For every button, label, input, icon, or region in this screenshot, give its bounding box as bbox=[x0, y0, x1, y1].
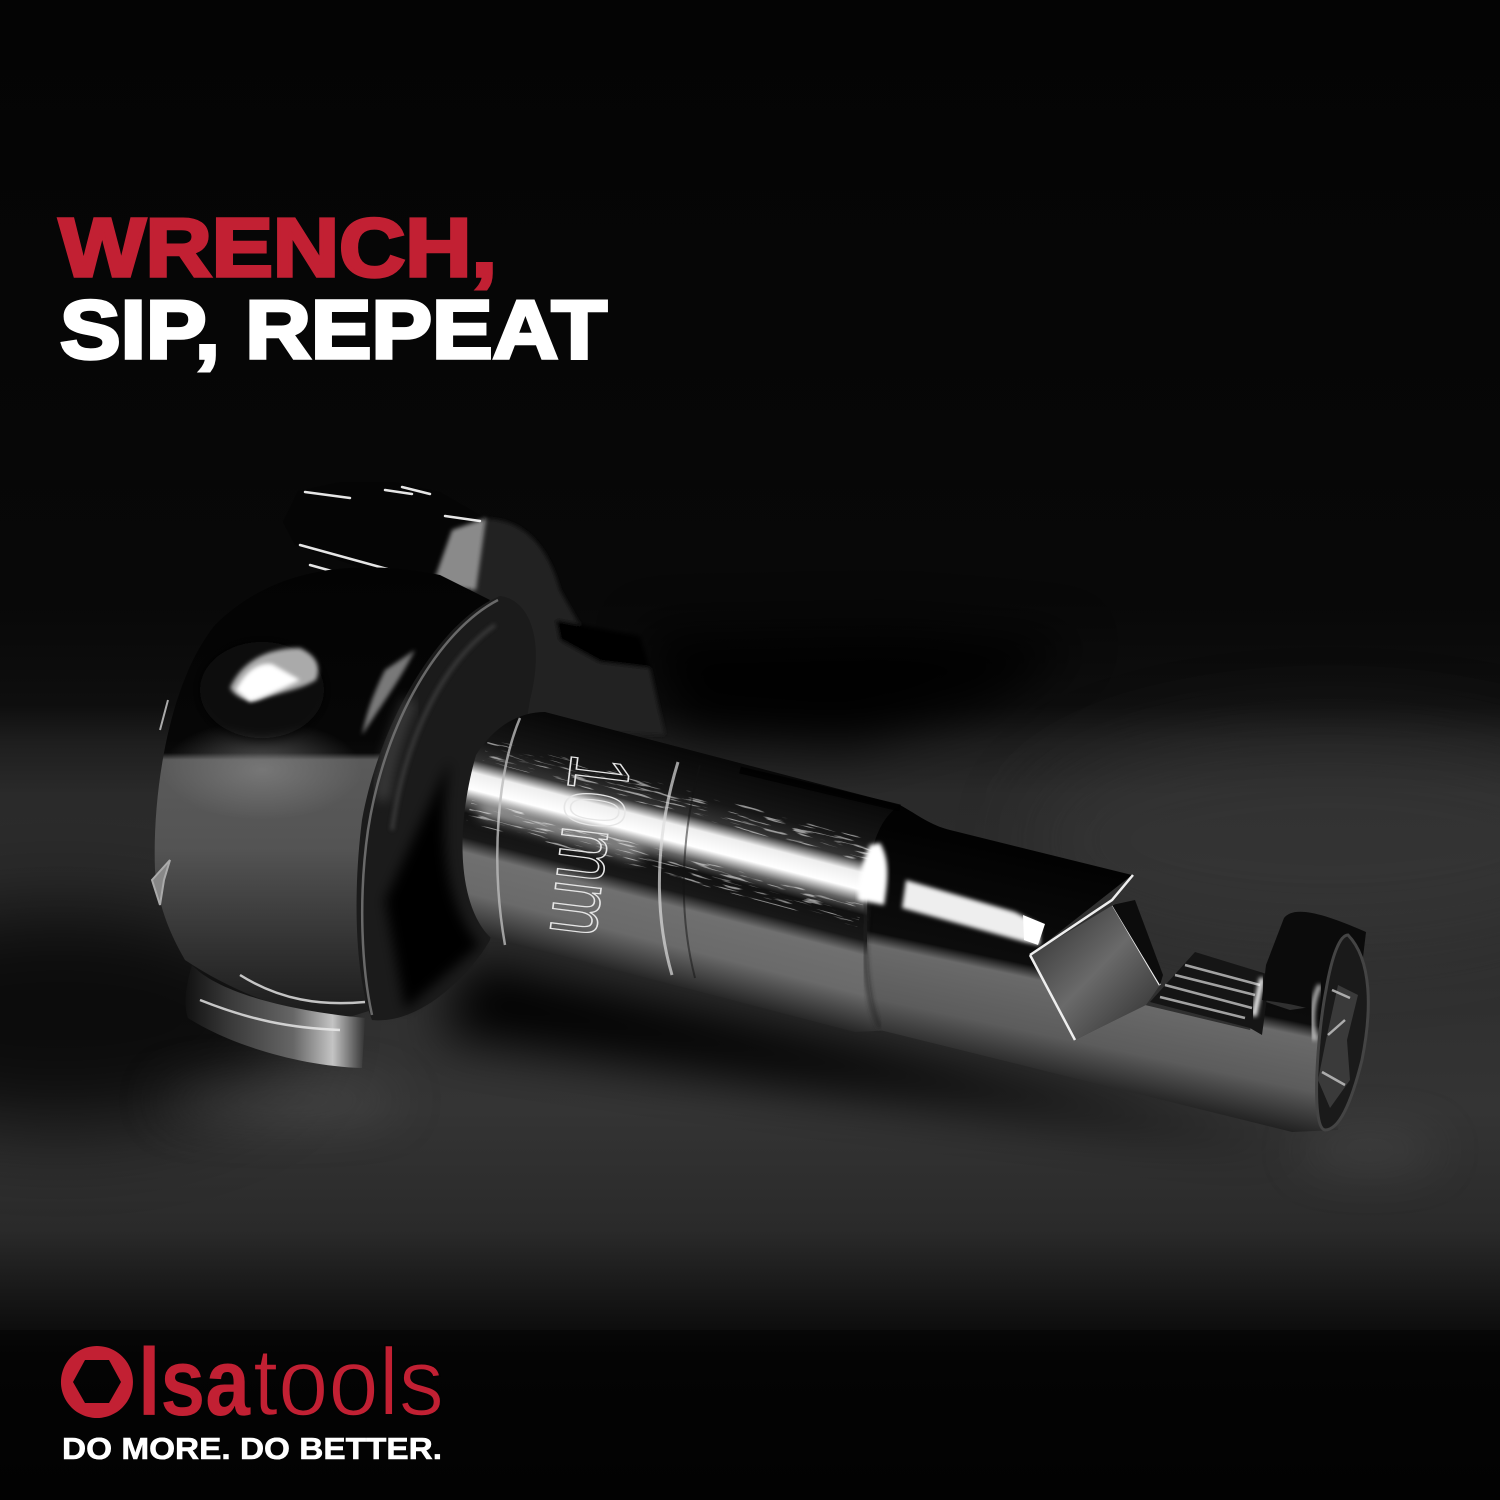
title line: WRENCH,: WRENCH, bbox=[59, 201, 497, 294]
rubber collar bbox=[357, 596, 536, 1020]
wordmark: tools: tools bbox=[253, 1329, 444, 1436]
bottle opener notch bbox=[1030, 875, 1163, 1040]
ball head bbox=[152, 567, 490, 1020]
title bbox=[59, 201, 607, 376]
title line: SIP, REPEAT: SIP, REPEAT bbox=[60, 283, 607, 376]
logo: Olsatools bbox=[61, 1329, 444, 1436]
product: chrome socket wrench bottle opener bbox=[152, 482, 1368, 1132]
socket body, narrow section with bottle opener blade bbox=[867, 805, 1360, 1132]
wordmark: lsa: lsa bbox=[138, 1329, 251, 1436]
top lug bbox=[283, 482, 486, 592]
chrome mottling along the socket bbox=[466, 737, 880, 927]
socket end ring bbox=[1262, 912, 1368, 1130]
socket body, wide section bbox=[462, 712, 902, 1032]
tagline: DO MORE. DO BETTER. bbox=[62, 1431, 442, 1466]
rear gray wrench arm behind collar bbox=[450, 519, 665, 760]
bottom lug bbox=[185, 965, 365, 1068]
icon: hexagon O bbox=[61, 1346, 133, 1418]
ribbed tooth behind notch bbox=[1150, 952, 1270, 1035]
engraved socket size 10mm: 10mm bbox=[531, 750, 648, 942]
socket grooves and reflections bbox=[480, 718, 1045, 1028]
